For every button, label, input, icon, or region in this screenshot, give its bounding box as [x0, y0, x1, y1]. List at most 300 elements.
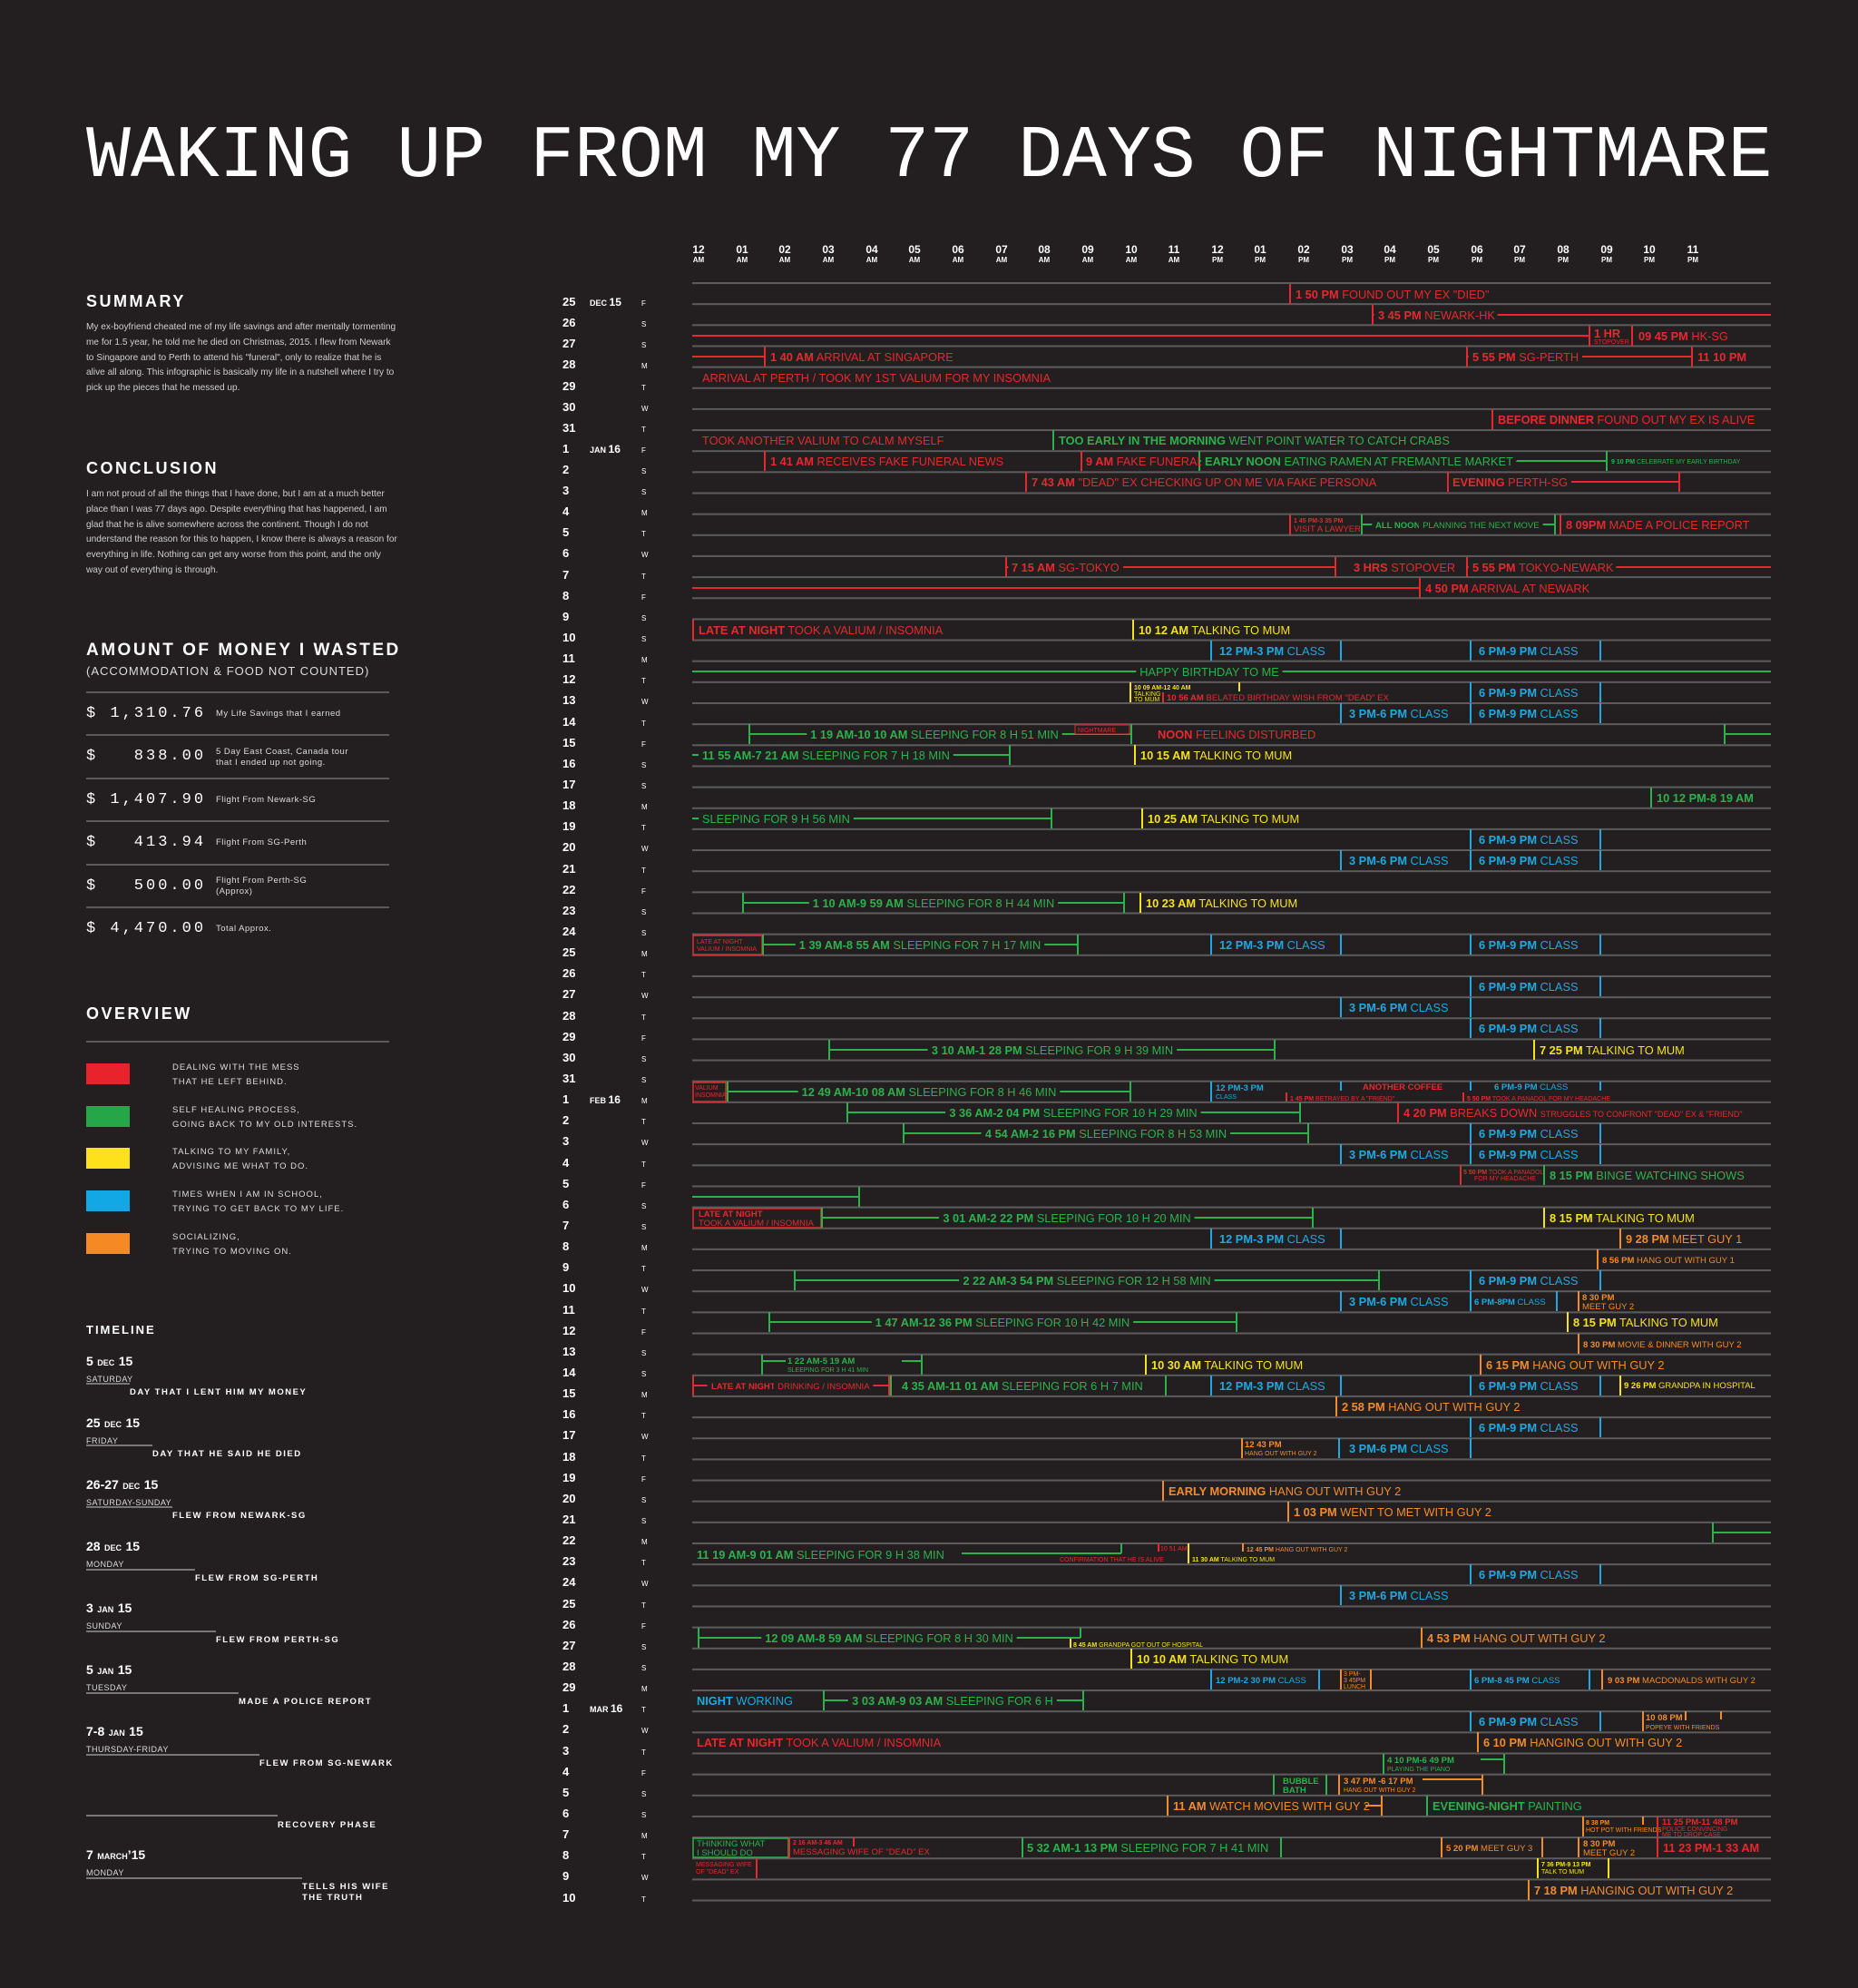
row: Feb 14: SLEEPING FOR 3 H 41 MIN: [787, 1367, 868, 1374]
date column: 28: [562, 1009, 575, 1023]
row: Jan 28: [1341, 997, 1471, 1017]
date column: T: [641, 1118, 646, 1126]
date column: 20: [562, 1492, 575, 1505]
row: Feb 25: 3 PM-6 PM CLASS: [1349, 1589, 1449, 1602]
row: Jan 5: 8 09PM MADE A POLICE REPORT: [1566, 518, 1750, 532]
date column: 30: [562, 1051, 575, 1064]
row: Feb 1: ANOTHER COFFEE: [1363, 1082, 1442, 1092]
row: Jan 2: 1 41 AM RECEIVES FAKE FUNERAL NEWS: [770, 455, 1003, 468]
hour axis header: AM: [1169, 256, 1180, 264]
row: Jan 10: LATE AT NIGHT TOOK A VALIUM / INSOMNIA: [699, 623, 944, 637]
date column: 16: [562, 757, 575, 770]
row: Jan 19: SLEEPING FOR 9 H 56 MIN: [702, 812, 850, 826]
row: Jan 25: 1 39 AM-8 55 AM SLEEPING FOR 7 H 17 MIN: [799, 938, 1041, 952]
row: Feb 18: 12 43 PM: [1245, 1440, 1282, 1450]
timeline entries: 5 JAN 15: [86, 1662, 132, 1677]
row: Mar 3: 6 10 PM HANGING OUT WITH GUY 2: [1483, 1736, 1682, 1749]
hour axis header: 09: [1081, 243, 1094, 256]
row: Jan 5: [1290, 514, 1750, 534]
overview legend: ADVISING ME WHAT TO DO.: [172, 1161, 308, 1171]
date column: 13: [562, 1345, 575, 1358]
row: Feb 14: 10 30 AM TALKING TO MUM: [1151, 1358, 1303, 1372]
date column: S: [641, 341, 646, 349]
money table: Flight From Perth-SG: [216, 876, 307, 886]
row: Jan 7: [1006, 557, 1771, 577]
row: Dec 29: ARRIVAL AT PERTH / TOOK MY 1ST VALIUM FOR MY INSOMNIA: [702, 371, 1051, 385]
date column: 18: [562, 1450, 575, 1464]
row: Jan 8: 4 50 PM ARRIVAL AT NEWARK: [1425, 582, 1590, 595]
date column: S: [641, 614, 646, 622]
conclusion text: I am not proud of all the things that I have done, but I am at a much better place than I was 77 days ago. Despite everything that has happened, I am glad that he is alive somewhere across the continent. Though I do not understand the reason for this to happen, I know there is always a reason for everything in life. Nothing can get any worse from this point, and the only way out of everything is through.: [86, 489, 397, 575]
date column: 8: [562, 589, 569, 602]
row: Jan 28: 3 PM-6 PM CLASS: [1349, 1001, 1449, 1014]
date column: 4: [562, 1156, 570, 1170]
row: Jan 16: 11 55 AM-7 21 AM SLEEPING FOR 7 H 18 MIN: [702, 749, 950, 762]
legend: orange: [86, 1233, 130, 1254]
date column: 28: [562, 357, 575, 371]
timeline entries: 7 MARCH’15: [86, 1847, 145, 1862]
row: Mar 3: [697, 1732, 1682, 1752]
date column: S: [641, 782, 646, 790]
hour axis header: 10: [1643, 243, 1656, 256]
date column: T: [641, 1307, 646, 1316]
date column: M: [641, 1832, 648, 1840]
hour axis header: PM: [1342, 256, 1353, 264]
row: Feb 2: 4 20 PM BREAKS DOWN STRUGGLES TO CONFRONT "DEAD" EX & "FRIEND": [1403, 1106, 1743, 1120]
date column: 1: [562, 1092, 569, 1106]
row: Mar 7: [1583, 1817, 1738, 1838]
date column: FEB 16: [590, 1093, 621, 1106]
date column: S: [641, 1076, 646, 1084]
row: Jan 15: [749, 724, 1771, 744]
row: Jan 13: [1130, 682, 1600, 703]
date column: 29: [562, 379, 575, 393]
row: Feb 13: 8 30 PM MOVIE & DINNER WITH GUY 2: [1583, 1340, 1742, 1350]
date column: W: [641, 1433, 649, 1441]
hour axis header: 04: [1384, 243, 1396, 256]
row: Feb 12: 8 15 PM TALKING TO MUM: [1573, 1316, 1718, 1329]
row: Jan 21: [1341, 850, 1600, 870]
date column: S: [641, 908, 646, 916]
date column: 11: [562, 1303, 575, 1317]
row: Dec 28: 11 10 PM: [1697, 350, 1746, 364]
row: Feb 15: 6 PM-9 PM CLASS: [1479, 1379, 1579, 1393]
date column: 21: [562, 1513, 575, 1526]
money table: $ 1,407.90: [86, 791, 206, 808]
hour axis header: PM: [1212, 256, 1223, 264]
row: Jan 11: 6 PM-9 PM CLASS: [1479, 644, 1579, 658]
date column: 24: [562, 1575, 576, 1589]
date column: S: [641, 1349, 646, 1357]
timeline entries: SATURDAY: [86, 1375, 133, 1384]
hour axis header: 11: [1687, 243, 1699, 256]
date column: 30: [562, 400, 575, 414]
date column: DEC 15: [590, 296, 621, 308]
timeline entries: MADE A POLICE REPORT: [239, 1697, 372, 1707]
row: Feb 9: 8 56 PM HANG OUT WITH GUY 1: [1602, 1256, 1735, 1266]
hour axis header: AM: [823, 256, 835, 264]
date column: T: [641, 1559, 646, 1567]
row: Mar 8: MESSAGING WIFE OF "DEAD" EX: [793, 1847, 931, 1857]
timeline entries: 25 DEC 15: [86, 1415, 140, 1430]
row: Feb 23: 11 19 AM-9 01 AM SLEEPING FOR 9 H 38 MIN: [697, 1548, 944, 1562]
row: Mar 9: MESSAGING WIFE: [696, 1862, 752, 1868]
timeline entries: FLEW FROM SG-PERTH: [195, 1573, 318, 1583]
date column: JAN 16: [590, 443, 621, 455]
row: Feb 1: 12 49 AM-10 08 AM SLEEPING FOR 8 H 46 MIN: [802, 1085, 1056, 1099]
legend: green: [86, 1106, 130, 1127]
row: Jan 1: TOOK ANOTHER VALIUM TO CALM MYSELF: [702, 434, 944, 447]
row: Feb 29: 3 PM-: [1344, 1671, 1361, 1678]
row: Feb 28: 10 10 AM TALKING TO MUM: [1137, 1652, 1288, 1666]
row: Feb 27: 8 45 AM GRANDPA GOT OUT OF HOSPITAL: [1073, 1642, 1203, 1649]
date column: 20: [562, 840, 575, 854]
date column: T: [641, 1895, 646, 1904]
date column: 15: [562, 736, 575, 749]
row: Mar 8: [693, 1837, 1759, 1858]
overview legend: SOCIALIZING,: [172, 1232, 240, 1242]
row: Jan 30: [829, 1040, 1685, 1060]
date column: S: [641, 1055, 646, 1063]
row: Feb 11: 8 30 PM: [1582, 1293, 1614, 1303]
row: Feb 23: CONFIRMATION THAT HE IS ALIVE: [1060, 1557, 1164, 1563]
overview heading: OVERVIEW: [86, 1004, 192, 1023]
money table: Flight From Newark-SG: [216, 795, 316, 805]
hour axis header: 03: [1341, 243, 1354, 256]
date column: F: [641, 1475, 646, 1484]
legend: blue: [86, 1190, 130, 1211]
date column: 3: [562, 484, 569, 497]
date column: 25: [562, 1597, 575, 1611]
date column: S: [641, 1664, 646, 1672]
row: Jan 23: 1 10 AM-9 59 AM SLEEPING FOR 8 H 44 MIN: [813, 896, 1054, 910]
overview legend: [86, 1041, 389, 1257]
date column: 18: [562, 798, 575, 812]
summary text: My ex-boyfriend cheated me of my life savings and after mentally tormenting me for 1.5 year, he told me he died on Christmas, 2015. I flew from Newark to Singapore and to Perth to attend his "funeral", only to realize that he is alive all along. This infographic is basically my life in a nutshell where I try to pick up the pieces that he messed up.: [86, 322, 396, 393]
row: Feb 21: 1 03 PM WENT TO MET WITH GUY 2: [1294, 1505, 1491, 1519]
row: Feb 23: 12 45 PM HANG OUT WITH GUY 2: [1247, 1547, 1347, 1553]
legend: red: [86, 1063, 130, 1084]
row: Feb 1: VALIUM: [695, 1085, 719, 1092]
date column: M: [641, 362, 648, 370]
date column: 29: [562, 1680, 575, 1694]
date column: T: [641, 426, 646, 434]
row: Dec 31: BEFORE DINNER FOUND OUT MY EX IS ALIVE: [1498, 413, 1755, 426]
row: Feb 29: 3 45PM: [1344, 1678, 1365, 1684]
hour axis header: PM: [1298, 256, 1309, 264]
row: Jan 8: [692, 578, 1590, 598]
hour axis header: PM: [1428, 256, 1439, 264]
money table: $ 413.94: [86, 834, 206, 851]
date column: S: [641, 635, 646, 643]
date column: T: [641, 720, 646, 728]
row: Jan 25: VALIUM / INSOMNIA: [697, 946, 757, 953]
date column: 6: [562, 1807, 569, 1820]
date column: 7: [562, 568, 569, 582]
date column: 23: [562, 1554, 575, 1568]
overview legend: TRYING TO GET BACK TO MY LIFE.: [172, 1204, 344, 1214]
row: Feb 20: EARLY MORNING HANG OUT WITH GUY 2: [1169, 1484, 1401, 1498]
row: Jan 21: 6 PM-9 PM CLASS: [1479, 854, 1579, 867]
row: Feb 14: 6 15 PM HANG OUT WITH GUY 2: [1486, 1358, 1665, 1372]
row: Jan 18: 10 12 PM-8 19 AM: [1657, 791, 1754, 805]
date column: W: [641, 1727, 649, 1735]
row: Jan 5: VISIT A LAWYER: [1294, 524, 1361, 534]
row: Jan 10: [693, 620, 1290, 640]
date column: T: [641, 1014, 646, 1022]
row: Jan 25: 6 PM-9 PM CLASS: [1479, 938, 1579, 952]
hour axis header: PM: [1644, 256, 1655, 264]
row: Mar 4: [1384, 1754, 1504, 1774]
date column: 26: [562, 1618, 575, 1631]
overview legend: DEALING WITH THE MESS: [172, 1063, 300, 1072]
date column: 17: [562, 1428, 575, 1442]
row: Jan 15: 1 19 AM-10 10 AM SLEEPING FOR 8 H 51 MIN: [810, 728, 1059, 741]
row: Feb 4: 6 PM-9 PM CLASS: [1479, 1148, 1579, 1161]
row: Feb 8: 12 PM-3 PM CLASS: [1219, 1232, 1325, 1246]
date column: S: [641, 1790, 646, 1798]
row: Feb 14: [762, 1355, 1665, 1375]
summary heading: SUMMARY: [86, 292, 186, 310]
row: Feb 23: 10 51 AM: [1160, 1546, 1188, 1552]
overview legend: THAT HE LEFT BEHIND.: [172, 1077, 288, 1087]
date column: 7: [562, 1827, 569, 1841]
timeline entries: SUNDAY: [86, 1621, 122, 1631]
row: Dec 27: 09 45 PM HK-SG: [1638, 329, 1728, 343]
timeline entries: DAY THAT I LENT HIM MY MONEY: [130, 1387, 307, 1397]
row: Dec 28: [692, 347, 1746, 367]
row: Jan 13: 6 PM-9 PM CLASS: [1479, 686, 1579, 700]
row: Feb 7: [693, 1208, 1695, 1229]
row: Feb 1: 12 PM-3 PM: [1216, 1083, 1264, 1093]
row: Jan 3: EVENING PERTH-SG: [1452, 475, 1568, 489]
hour axis header: 04: [865, 243, 878, 256]
row: Feb 29: 12 PM-2 30 PM CLASS: [1216, 1676, 1306, 1686]
overview legend: GOING BACK TO MY OLD INTERESTS.: [172, 1120, 357, 1130]
row: Jan 30: 7 25 PM TALKING TO MUM: [1540, 1043, 1685, 1057]
row: Jan 14: [1341, 703, 1600, 723]
row: Feb 11: 6 PM-8PM CLASS: [1474, 1298, 1546, 1307]
date column: T: [641, 1265, 646, 1273]
date column: 26: [562, 316, 575, 329]
overview legend: SELF HEALING PROCESS,: [172, 1105, 300, 1115]
date column: W: [641, 1139, 649, 1147]
hour axis header: AM: [693, 256, 705, 264]
row: Mar 8: 5 32 AM-1 13 PM SLEEPING FOR 7 H 41 MIN: [1027, 1841, 1268, 1855]
row: Feb 15: 12 PM-3 PM CLASS: [1219, 1379, 1325, 1393]
date column: 8: [562, 1239, 569, 1253]
row: Feb 18: 3 PM-6 PM CLASS: [1349, 1442, 1449, 1455]
hour axis header: 06: [1471, 243, 1483, 256]
hour axis header: AM: [779, 256, 791, 264]
hour axis header: 05: [1427, 243, 1440, 256]
date column: T: [641, 1601, 646, 1610]
hour axis header: 02: [778, 243, 791, 256]
row: Feb 11: MEET GUY 2: [1582, 1302, 1634, 1312]
row: Mar 9: TALK TO MUM: [1541, 1869, 1584, 1875]
date column: 5: [562, 1786, 569, 1799]
hour axis header: 05: [908, 243, 921, 256]
row: Jan 14: 3 PM-6 PM CLASS: [1349, 707, 1449, 720]
date column: 27: [562, 987, 575, 1001]
row: Feb 6: [692, 1187, 859, 1207]
hour axis header: 08: [1557, 243, 1570, 256]
row: Jan 16: 10 15 AM TALKING TO MUM: [1140, 749, 1292, 762]
row: Mar 5: BATH: [1283, 1786, 1306, 1796]
hour axis header: 12: [692, 243, 705, 256]
date column: 12: [562, 672, 575, 686]
hour axis header: PM: [1384, 256, 1395, 264]
date column: W: [641, 845, 649, 853]
row: Feb 29: [1211, 1670, 1755, 1690]
date column: S: [641, 1496, 646, 1504]
row: Jan 30: 3 10 AM-1 28 PM SLEEPING FOR 9 H 39 MIN: [932, 1043, 1173, 1057]
date column: 23: [562, 904, 575, 917]
timeline heading: TIMELINE: [86, 1323, 156, 1337]
hour axis header: AM: [866, 256, 878, 264]
row: Mar 6: [1168, 1796, 1582, 1816]
hour axis header: [692, 243, 1699, 264]
money table: $ 500.00: [86, 877, 206, 895]
hour axis header: 09: [1600, 243, 1613, 256]
title: WAKING UP FROM MY 77 DAYS OF NIGHTMARE: [86, 115, 1773, 199]
row: Mar 2: POPEYE WITH FRIENDS: [1646, 1725, 1720, 1731]
row: Feb 2: 3 36 AM-2 04 PM SLEEPING FOR 10 H 29 MIN: [949, 1106, 1198, 1120]
hour axis header: AM: [996, 256, 1008, 264]
date column: M: [641, 509, 648, 517]
row: Mar 8: 5 20 PM MEET GUY 3: [1446, 1844, 1532, 1854]
timeline entries: THURSDAY-FRIDAY: [86, 1745, 169, 1754]
row: Jan 19: [692, 808, 1299, 828]
row: Dec 25: 1 50 PM FOUND OUT MY EX "DIED": [1296, 288, 1489, 301]
date column: 4: [562, 1765, 570, 1778]
row: Mar 1: [697, 1690, 1083, 1710]
row: Jan 13: TO MUM: [1134, 697, 1159, 703]
date column: 14: [562, 715, 576, 729]
date column: 29: [562, 1030, 575, 1043]
timeline entries: 5 DEC 15: [86, 1354, 132, 1368]
row: Mar 8: MEET GUY 2: [1583, 1848, 1635, 1858]
date column: MAR 16: [590, 1702, 623, 1715]
date column: 4: [562, 504, 570, 518]
hour axis header: PM: [1514, 256, 1525, 264]
row: Feb 18: HANG OUT WITH GUY 2: [1245, 1451, 1317, 1457]
date column: 5: [562, 525, 569, 539]
hour axis header: 10: [1125, 243, 1138, 256]
date column: T: [641, 1853, 646, 1861]
money table: Total Approx.: [216, 924, 271, 934]
row: Feb 29: 9 03 PM MACDONALDS WITH GUY 2: [1608, 1676, 1755, 1686]
row: Jan 29: 6 PM-9 PM CLASS: [1479, 1022, 1579, 1035]
date column: 17: [562, 778, 575, 791]
date column: W: [641, 1874, 649, 1882]
money subtitle: (ACCOMMODATION & FOOD NOT COUNTED): [86, 664, 369, 678]
date column: 31: [562, 1072, 575, 1085]
hour axis header: PM: [1472, 256, 1482, 264]
timeline entries: FRIDAY: [86, 1436, 118, 1445]
row: Jan 15: NOON FEELING DISTURBED: [1158, 728, 1315, 741]
row: Feb 5: 5 50 PM TOOK A PANADOL,: [1463, 1170, 1545, 1176]
row: Dec 28: 1 40 AM ARRIVAL AT SINGAPORE: [770, 350, 953, 364]
date column: F: [641, 1181, 646, 1190]
date column: 2: [562, 463, 569, 476]
date column: M: [641, 803, 648, 811]
money table: $ 838.00: [86, 748, 206, 765]
row: Mar 4: PLAYING THE PIANO: [1387, 1767, 1451, 1773]
date column: 3: [562, 1134, 569, 1148]
legend: yellow: [86, 1148, 130, 1169]
hour axis header: AM: [909, 256, 921, 264]
date column: 7: [562, 1219, 569, 1232]
row: Feb 1: INSOMNIA: [695, 1092, 727, 1099]
row: Mar 9: OF "DEAD" EX: [696, 1869, 739, 1875]
timeline entries: RECOVERY PHASE: [278, 1820, 376, 1830]
hour axis header: AM: [1039, 256, 1051, 264]
row: Jan 11: 12 PM-3 PM CLASS: [1219, 644, 1325, 658]
date column: T: [641, 867, 646, 875]
money table: 5 Day East Coast, Canada tour: [216, 747, 348, 757]
row: Feb 1: 6 PM-9 PM CLASS: [1494, 1082, 1568, 1092]
date column: M: [641, 950, 648, 958]
row: Feb 24: 6 PM-9 PM CLASS: [1479, 1568, 1579, 1582]
row: Mar 2: 10 08 PM: [1646, 1713, 1683, 1723]
row: Mar 5: 3 47 PM -6 17 PM: [1344, 1777, 1413, 1787]
date column: 9: [562, 1869, 569, 1883]
row: Jan 2: 9 AM FAKE FUNERAL: [1086, 455, 1204, 468]
date column: 5: [562, 1177, 569, 1190]
hour axis header: PM: [1558, 256, 1569, 264]
row: Jan 2: [765, 451, 1741, 471]
row: Feb 10: [795, 1270, 1600, 1290]
row: Mar 2: 6 PM-9 PM CLASS: [1479, 1715, 1579, 1728]
date column: S: [641, 1517, 646, 1525]
money table: [86, 691, 389, 937]
row: Jan 15: NIGHTMARE: [1078, 728, 1116, 734]
row: Feb 29: 6 PM-8 45 PM CLASS: [1474, 1676, 1560, 1686]
date column: T: [641, 1748, 646, 1757]
row: Jan 27: 6 PM-9 PM CLASS: [1479, 980, 1579, 994]
row: Feb 27: 4 53 PM HANG OUT WITH GUY 2: [1427, 1631, 1606, 1645]
date column: 13: [562, 693, 575, 707]
date column: T: [641, 1160, 646, 1169]
row: Jan 1: [702, 430, 1450, 450]
date column: T: [641, 530, 646, 538]
timeline entries: FLEW FROM SG-NEWARK: [259, 1758, 394, 1768]
overview legend: TRYING TO MOVING ON.: [172, 1247, 292, 1257]
timeline entries: DAY THAT HE SAID HE DIED: [152, 1449, 302, 1459]
row: Mar 9: [696, 1858, 1609, 1878]
row: Jan 2: EARLY NOON EATING RAMEN AT FREMANTLE MARKET: [1205, 455, 1513, 468]
row: Jan 11: [1211, 641, 1600, 661]
date column: F: [641, 446, 646, 455]
date column: S: [641, 1643, 646, 1651]
overview legend: TALKING TO MY FAMILY,: [172, 1147, 290, 1157]
row: Feb 7: 3 01 AM-2 22 PM SLEEPING FOR 10 H 20 MIN: [943, 1211, 1191, 1225]
hour axis header: 08: [1038, 243, 1051, 256]
money table: Flight From SG-Perth: [216, 837, 307, 847]
date column: F: [641, 1034, 646, 1043]
date column: 8: [562, 1848, 569, 1862]
timeline entries: [86, 1354, 394, 1903]
timeline entries: TUESDAY: [86, 1683, 127, 1692]
date column: T: [641, 573, 646, 581]
row: Feb 1: 5 50 PM TOOK A PANADOL FOR MY HEADACHE: [1467, 1096, 1610, 1102]
row: Dec 27: STOPOVER: [1594, 339, 1629, 346]
row: Dec 28: 5 55 PM SG-PERTH: [1472, 350, 1579, 364]
timeline entries: FLEW FROM PERTH-SG: [216, 1635, 339, 1645]
row: Mar 1: NIGHT WORKING: [697, 1694, 793, 1708]
date column: 9: [562, 610, 569, 623]
